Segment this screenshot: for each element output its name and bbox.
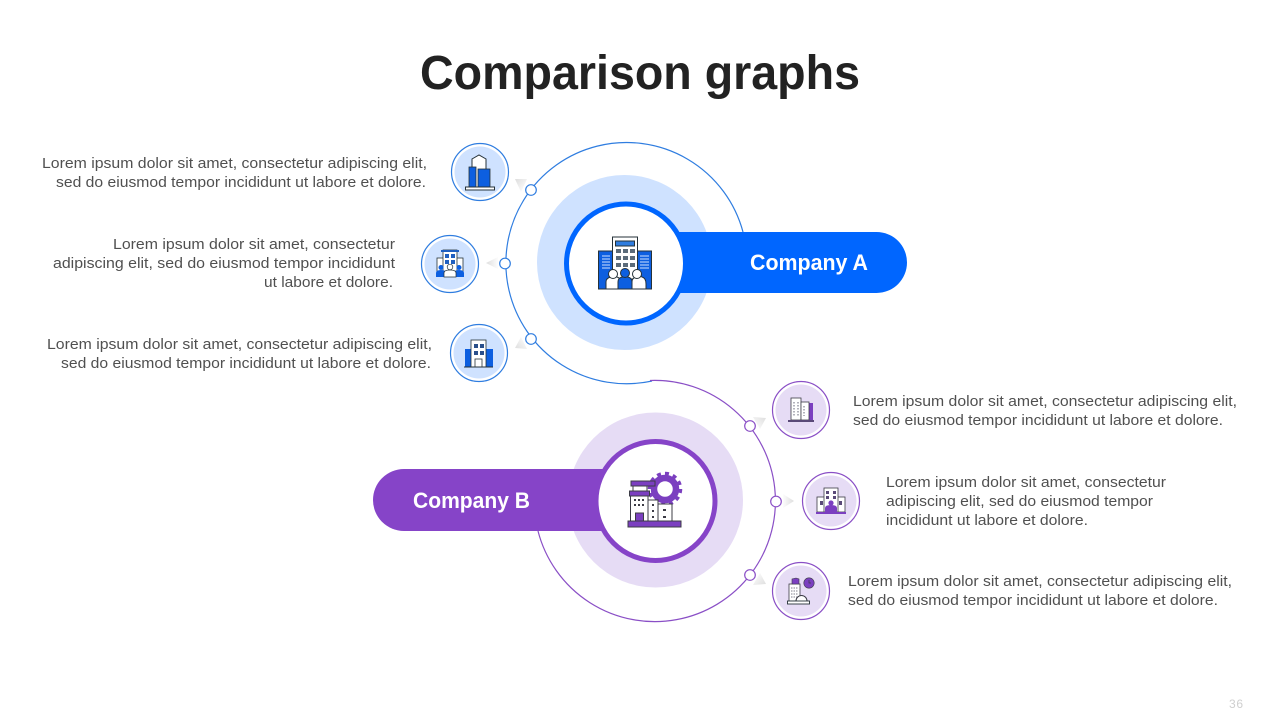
node [745, 570, 755, 580]
text block: sed do eiusmod tempor incididunt ut labore et dolore. [848, 592, 1218, 609]
text block: Lorem ipsum dolor sit amet, consectetur [886, 474, 1166, 491]
node [771, 496, 781, 507]
purple orbit arc [538, 380, 775, 622]
text block [886, 474, 1166, 529]
text block [848, 573, 1232, 609]
item: blue 2 [53, 236, 510, 292]
text block: adipiscing elit, sed do eiusmod tempor incididunt [53, 255, 396, 272]
text block: Lorem ipsum dolor sit amet, consectetur adipiscing elit, [42, 155, 427, 172]
text block: sed do eiusmod tempor incididunt ut labore et dolore. [853, 412, 1223, 429]
text block [42, 155, 427, 191]
light blue halo [537, 175, 712, 350]
Company A pill: Company A [750, 250, 868, 275]
arrow [753, 417, 766, 429]
Company B pill [373, 469, 655, 531]
icon: office block [450, 324, 508, 382]
text block: sed do eiusmod tempor incididunt ut labore et dolore. [61, 355, 431, 372]
icon: factory with gear [628, 474, 681, 527]
Company B pill: Company B [413, 488, 530, 513]
light purple halo [568, 412, 743, 588]
page number: 36 [1229, 697, 1243, 711]
Company A pill [626, 232, 907, 293]
text block: Lorem ipsum dolor sit amet, consectetur adipiscing elit, [853, 393, 1237, 410]
arrow [515, 337, 527, 349]
item: purple 2 [771, 472, 1166, 530]
node [500, 258, 510, 269]
text block: adipiscing elit, sed do eiusmod tempor [886, 493, 1153, 510]
arrow [486, 257, 498, 269]
text block [47, 336, 432, 372]
panel: Company A diagram [506, 143, 907, 384]
centre disc [566, 204, 686, 323]
item: purple 1 [745, 382, 1237, 438]
node [526, 334, 536, 344]
icon: building with clock [772, 562, 830, 620]
node [745, 421, 755, 431]
node [526, 185, 536, 195]
text block: incididunt ut labore et dolore. [886, 512, 1088, 529]
text block: sed do eiusmod tempor incididunt ut labore et dolore. [56, 174, 426, 191]
arrow [783, 494, 794, 508]
icon: hospital [802, 472, 860, 530]
panel: Company B diagram [373, 380, 775, 622]
icon: office building with people [598, 237, 652, 289]
text block [53, 236, 396, 291]
item: purple 3 [745, 562, 1232, 620]
text block [853, 393, 1237, 429]
text block: Lorem ipsum dolor sit amet, consectetur adipiscing elit, [47, 336, 432, 353]
title: Comparison graphs [420, 47, 860, 100]
icon: twin towers [772, 382, 830, 438]
arrow [515, 179, 527, 192]
text block: Lorem ipsum dolor sit amet, consectetur [113, 236, 395, 253]
item: blue 1 [42, 144, 536, 200]
item: blue 3 [47, 324, 536, 382]
icon: towers [452, 144, 508, 200]
arrow [753, 573, 766, 585]
text block: ut labore et dolore. [264, 274, 393, 291]
centre disc [596, 442, 715, 560]
blue orbit arc [506, 143, 743, 384]
icon: hotel with people [422, 236, 478, 292]
text block: Lorem ipsum dolor sit amet, consectetur adipiscing elit, [848, 573, 1232, 590]
